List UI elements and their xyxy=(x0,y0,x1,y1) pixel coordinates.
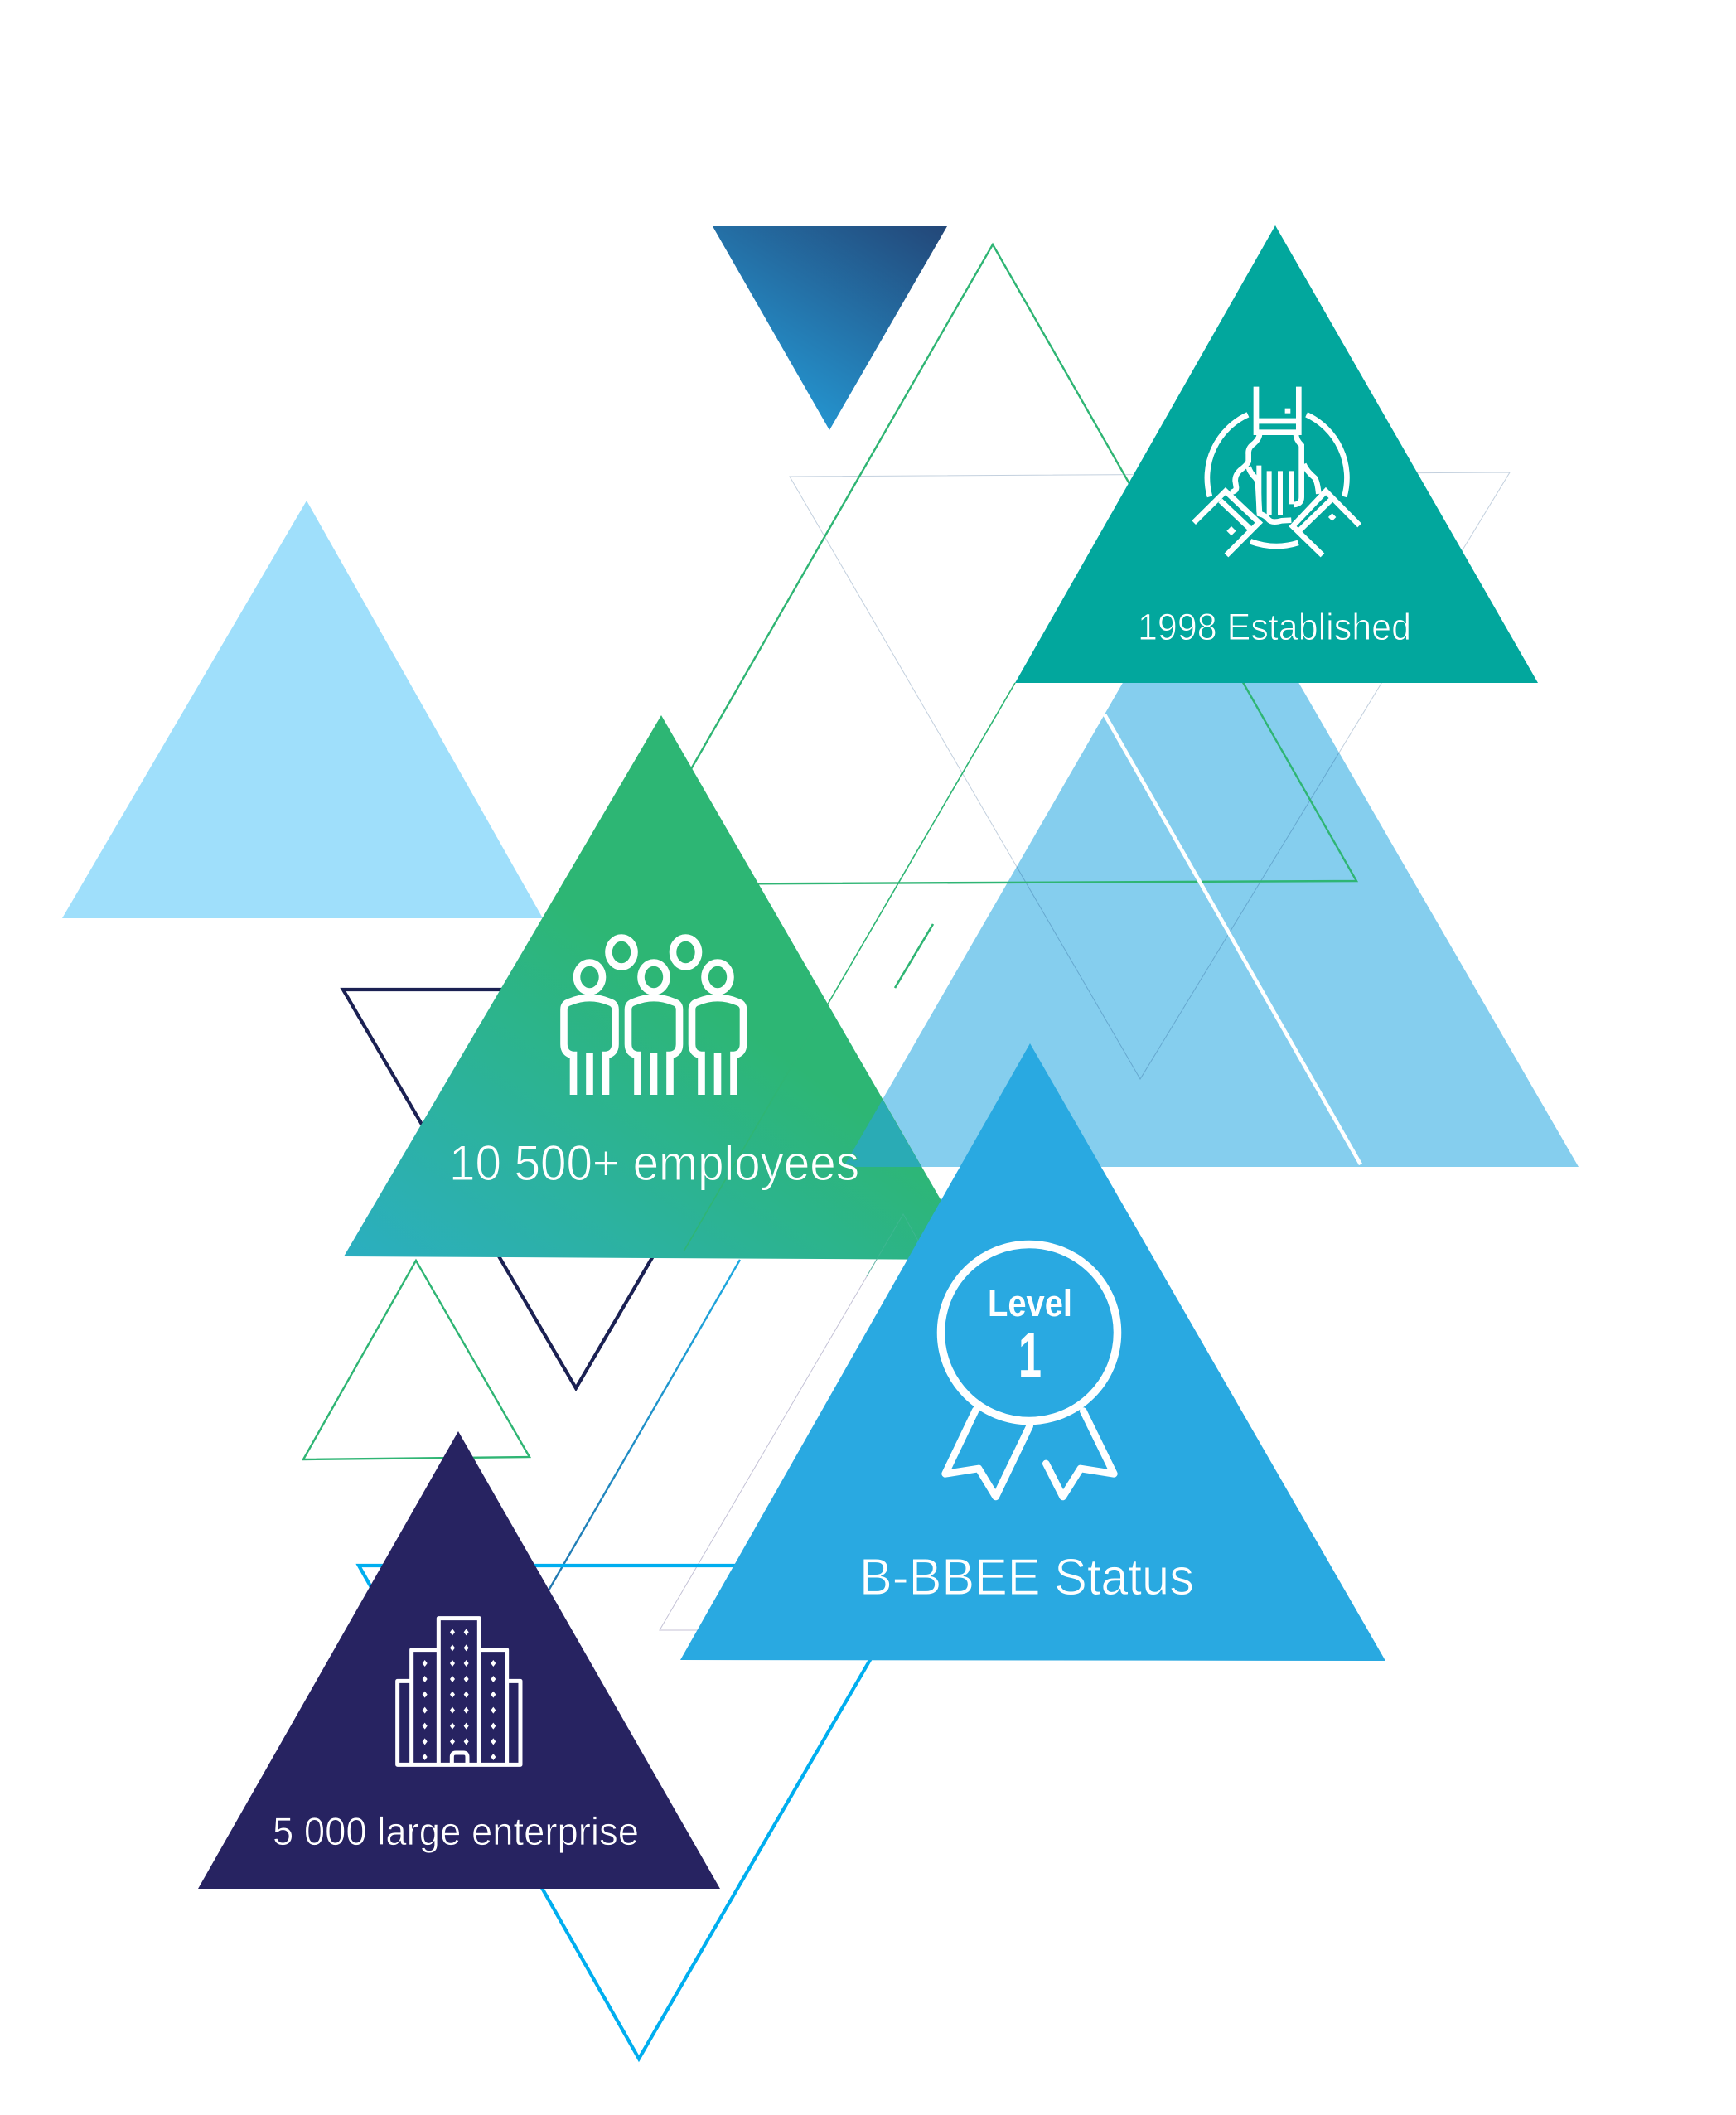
label: Level: Level xyxy=(988,1282,1072,1324)
icon: award ribbon xyxy=(941,1245,1117,1497)
green gradient triangle xyxy=(344,715,975,1260)
panel: large enterprise xyxy=(198,1431,720,1889)
blue triangle xyxy=(680,1043,1385,1661)
label: employees: 10 500+ employees xyxy=(449,1135,859,1191)
navy outline inverted triangle xyxy=(343,990,809,1388)
label: established: 1998 Established xyxy=(1138,606,1411,648)
panel: B-BBEE status xyxy=(680,1043,1385,1661)
icon: group of people xyxy=(563,938,743,1095)
label: large enterprise: 5 000 large enterprise xyxy=(273,1809,639,1853)
gradient inverted triangle top xyxy=(713,226,947,430)
small green outline triangle xyxy=(303,1261,530,1459)
large light blue triangle xyxy=(844,530,1579,1167)
short green segment xyxy=(895,924,933,988)
label: B-BBEE Status: B-BBEE Status xyxy=(859,1549,1194,1606)
icon: office buildings xyxy=(398,1619,520,1764)
teal triangle xyxy=(1015,225,1538,683)
grey outline lower triangle xyxy=(660,1214,1146,1630)
white diagonal line xyxy=(1105,714,1361,1164)
bright blue outline inverted triangle xyxy=(359,1566,925,2059)
navy triangle xyxy=(198,1431,720,1889)
pale blue triangle left xyxy=(62,501,543,918)
overlap tint with light blue triangle xyxy=(844,1100,921,1167)
panel: established xyxy=(1015,225,1538,683)
icon: joined hands xyxy=(1194,387,1360,555)
faint grey apex over triangle xyxy=(867,1214,918,1276)
grey outline inverted triangle xyxy=(790,472,1510,1079)
label: 1: 1 xyxy=(1018,1320,1042,1391)
green diagonal line over triangle xyxy=(684,683,1015,1251)
large green outline triangle xyxy=(625,244,1356,884)
blue diagonal line xyxy=(530,1260,740,1622)
panel: employees xyxy=(344,683,1015,1276)
